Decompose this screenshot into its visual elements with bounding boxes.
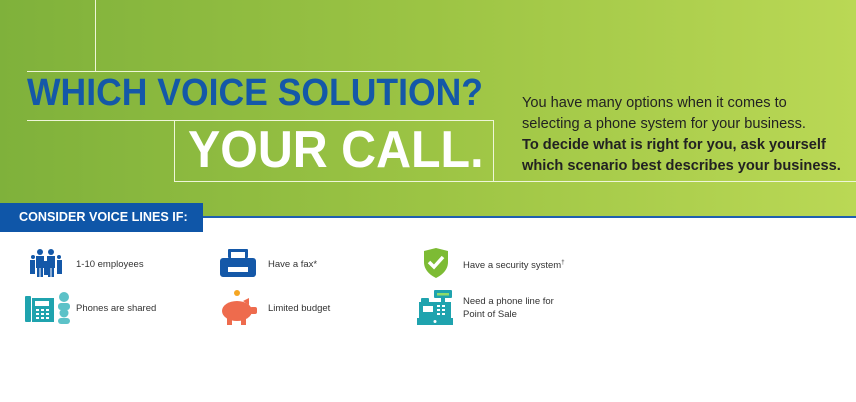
icon: desk phone [25, 292, 70, 324]
item: employees: 1-10 employees [76, 259, 144, 270]
item: budget [222, 290, 330, 325]
item: point of sale: Point of Sale [463, 309, 517, 320]
item: security: Have a security system† [463, 260, 565, 271]
intro text: You have many options when it comes to [522, 95, 787, 111]
blue rule [200, 216, 856, 218]
icon: cash register [417, 290, 453, 325]
item: point of sale [417, 290, 554, 325]
header banner [0, 0, 856, 216]
item: point of sale: Need a phone line for [463, 296, 554, 307]
item: fax [220, 249, 317, 277]
item: fax: Have a fax* [268, 259, 317, 270]
icon: printer [220, 249, 256, 277]
intro text [522, 95, 841, 174]
icon: shield check [424, 248, 448, 278]
title line 1: WHICH VOICE SOLUTION? [27, 72, 483, 114]
item: budget: Limited budget [268, 303, 330, 314]
item: phones shared: Phones are shared [76, 303, 156, 314]
item: phones shared [25, 292, 156, 324]
intro text: which scenario best describes your business. [522, 158, 841, 174]
section label [0, 203, 203, 232]
item: security [424, 248, 565, 278]
intro text: To decide what is right for you, ask yourself [522, 137, 826, 153]
title box: your call: YOUR CALL. [188, 121, 484, 179]
icon: people [30, 249, 62, 277]
intro text: selecting a phone system for your business. [522, 116, 806, 132]
section label: CONSIDER VOICE LINES IF: [19, 210, 188, 224]
icon: piggy bank [222, 290, 257, 325]
item: employees [30, 249, 144, 277]
